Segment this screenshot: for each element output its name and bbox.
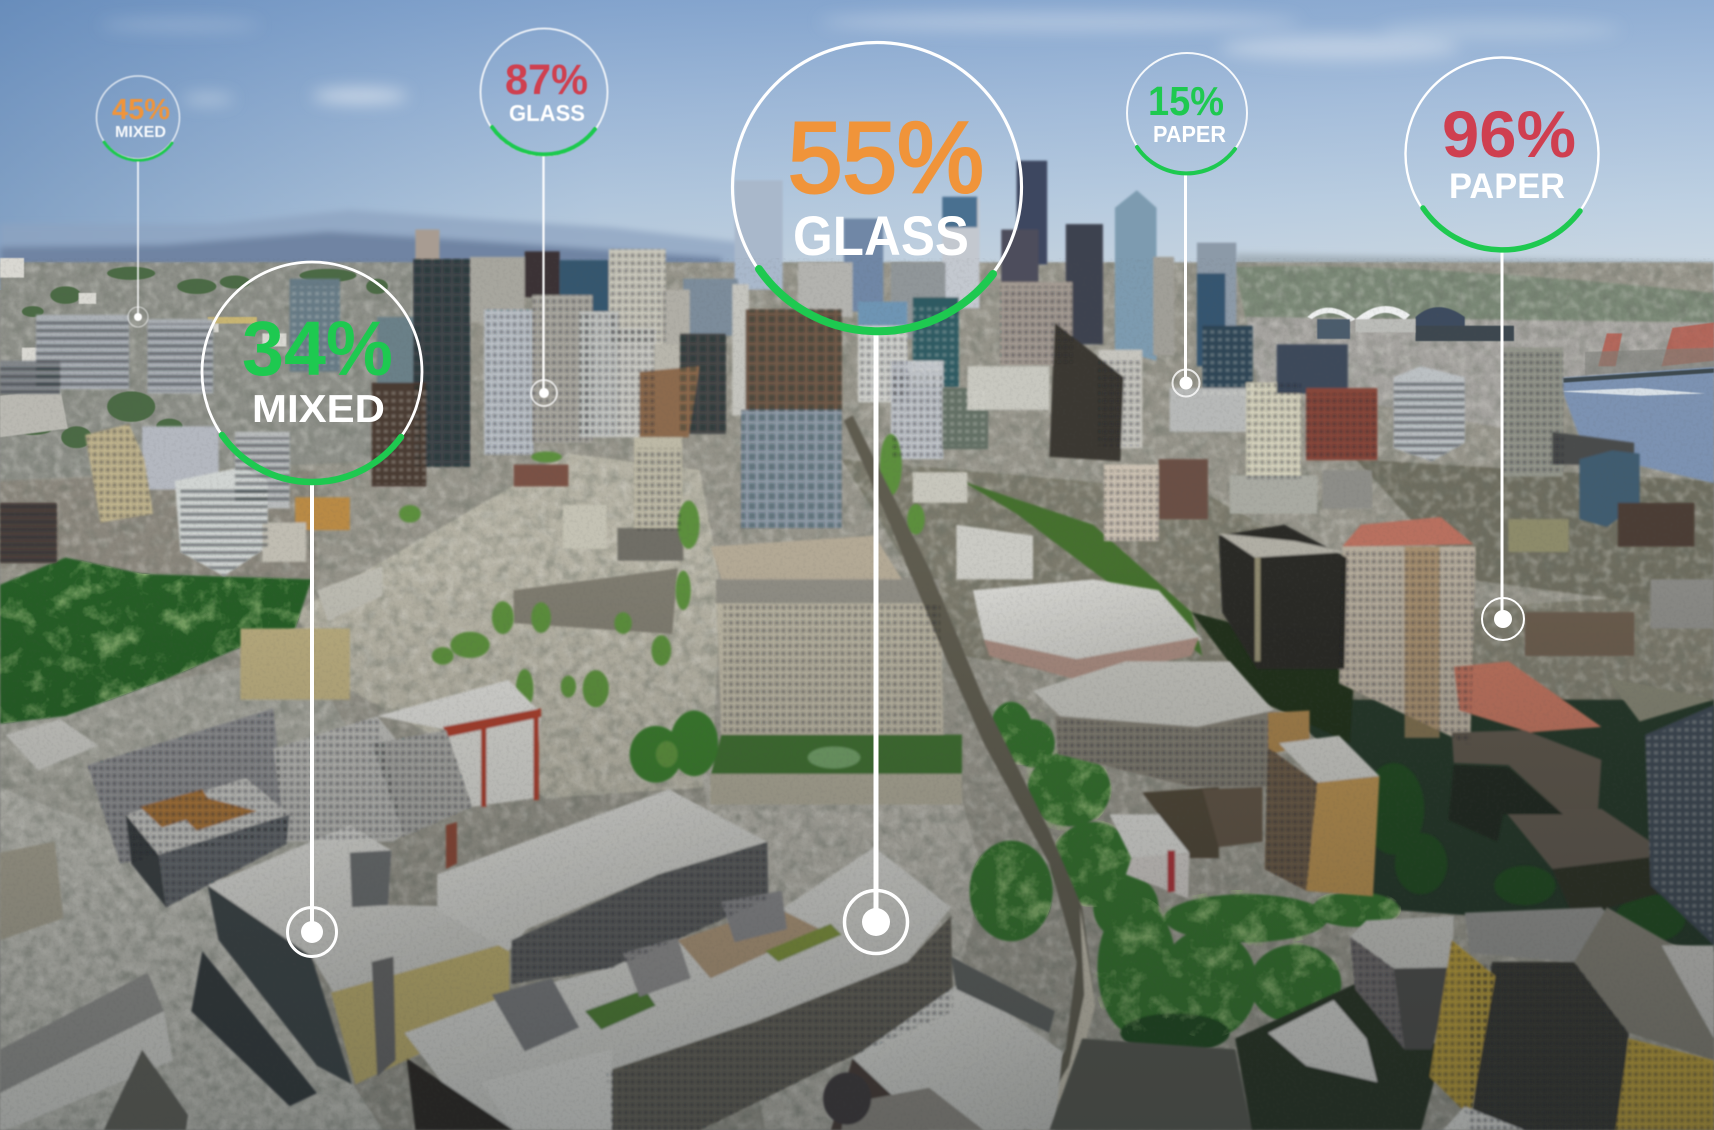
ring xyxy=(480,28,608,156)
value: 87% xyxy=(505,56,588,104)
water and dark greenery xyxy=(962,366,1714,951)
callout: 15% paper xyxy=(1127,53,1247,396)
label: PAPER xyxy=(1449,167,1565,206)
hill and port details xyxy=(1307,306,1714,396)
ring xyxy=(202,262,422,482)
callout: 34% mixed xyxy=(202,262,422,956)
ring xyxy=(1127,53,1247,173)
far city texture xyxy=(0,262,1714,1130)
callout: 55% glass xyxy=(732,42,1022,954)
leader line xyxy=(1500,252,1504,619)
gauge arc xyxy=(104,142,172,160)
distant mountains xyxy=(0,210,1714,295)
sky xyxy=(0,0,1714,290)
ground and districts xyxy=(0,262,1714,1130)
anchor marker xyxy=(1482,598,1524,640)
ring xyxy=(96,76,180,159)
leader line xyxy=(874,333,878,922)
lower left and lower center buildings xyxy=(0,680,1062,1130)
leader line xyxy=(310,483,314,932)
label: MIXED xyxy=(252,388,385,431)
leader line xyxy=(137,159,139,317)
anchor marker xyxy=(531,380,557,406)
gauge arc xyxy=(492,127,595,154)
callout: 87% glass xyxy=(480,28,608,406)
lower right buildings xyxy=(1049,907,1714,1130)
gauge arc xyxy=(759,269,993,331)
skyline towers xyxy=(0,161,1714,700)
gauge arc xyxy=(222,435,401,482)
anchor marker xyxy=(1172,370,1200,396)
center and right blocks xyxy=(399,415,1714,1130)
gauge arc xyxy=(1423,208,1580,250)
label: MIXED xyxy=(115,124,166,141)
value: 55% xyxy=(788,102,984,214)
building window textures xyxy=(0,249,1714,1130)
value: 45% xyxy=(112,94,170,126)
ring xyxy=(1406,58,1598,250)
value: 15% xyxy=(1148,78,1224,124)
label: PAPER xyxy=(1153,121,1226,147)
anchor marker xyxy=(844,890,908,954)
leader line xyxy=(542,155,545,393)
leader line xyxy=(1184,174,1187,383)
ring xyxy=(732,42,1022,332)
callout: 96% paper xyxy=(1406,58,1598,640)
forest and tree canopy xyxy=(0,557,1686,1107)
far left detail xyxy=(0,258,388,448)
photo grain and shading xyxy=(0,258,1714,1130)
value: 34% xyxy=(242,306,393,392)
anchor marker xyxy=(288,908,336,956)
label: GLASS xyxy=(793,204,969,267)
label: GLASS xyxy=(509,100,585,126)
anchor marker xyxy=(128,307,148,327)
callout: 45% mixed xyxy=(96,76,180,327)
value: 96% xyxy=(1442,97,1576,171)
gauge arc xyxy=(1137,147,1235,173)
